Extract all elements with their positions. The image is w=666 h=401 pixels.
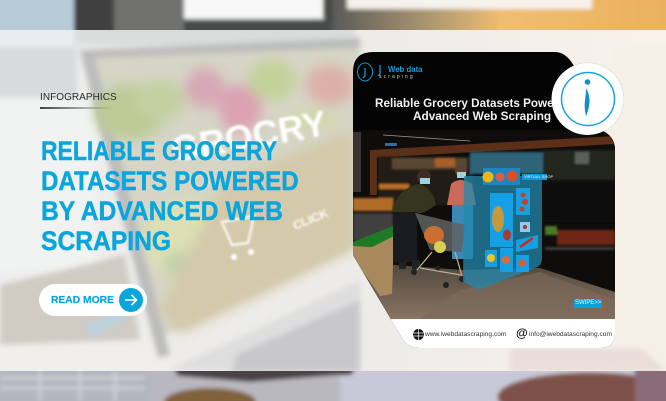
section label: INFOGRAPHICS [40, 92, 117, 103]
email contact [516, 326, 612, 340]
social card with photo [353, 52, 615, 348]
holographic panel [463, 176, 542, 290]
person in green shirt [392, 170, 436, 269]
card logo: Web data [388, 65, 423, 74]
swipe label: SWIPE>> [575, 300, 601, 306]
translucent white band: CLICK [291, 206, 330, 233]
translucent white band: GROCRY [168, 102, 330, 170]
icon: globe [413, 329, 424, 340]
store photo [353, 130, 615, 320]
website contact: www.iwebdatascraping.com [425, 331, 506, 338]
virtual shop tag: VIRTUAL SHOP [524, 174, 553, 179]
main heading: DATASETS POWERED [41, 166, 299, 196]
main heading: RELIABLE GROCERY [41, 136, 277, 166]
email contact: info@iwebdatascraping.com [529, 331, 612, 338]
card logo [357, 62, 423, 82]
icon: arrow [119, 288, 143, 312]
card logo: scraping [379, 74, 415, 80]
main heading: SCRAPING [41, 226, 171, 256]
main heading [41, 136, 299, 256]
main heading: BY ADVANCED WEB [41, 196, 283, 226]
icon: at sign: @ [516, 326, 528, 340]
holographic product tiles [482, 168, 547, 272]
card footer [391, 319, 615, 348]
shopping cart [411, 213, 465, 288]
website contact [413, 329, 506, 340]
card title: Reliable Grocery Datasets Powe [375, 97, 554, 110]
text: Advanced Web Scraping [413, 109, 551, 123]
read more button: READ MORE [51, 295, 114, 306]
read more button [39, 284, 147, 316]
person in pink shirt [447, 165, 476, 259]
